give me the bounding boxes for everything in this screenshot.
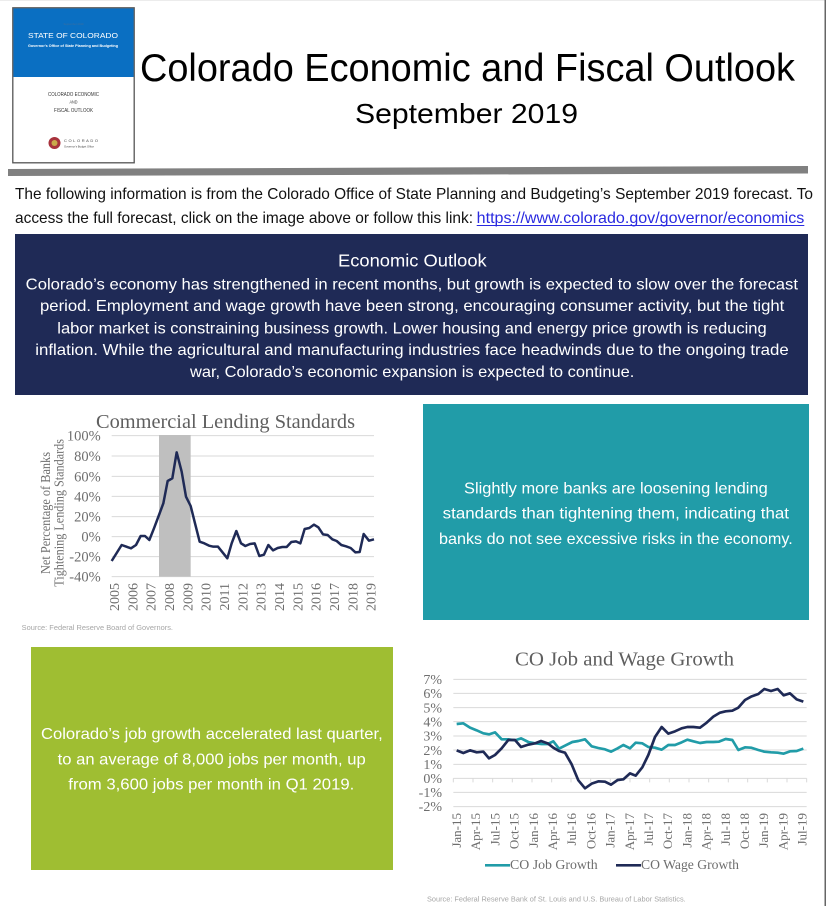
report cover thumbnail: Governor's Budget Office — [64, 144, 94, 148]
y axis labels: 0% — [81, 530, 101, 546]
y axis labels: 1% — [423, 758, 442, 773]
x axis labels: Jan-15 — [449, 813, 464, 848]
y axis labels: 80% — [74, 449, 101, 465]
intro text with link: access the full forecast, click on the image above or follow this link: — [15, 210, 473, 227]
panel body text — [26, 276, 799, 381]
report cover thumbnail: COLORADO ECONOMIC — [48, 92, 99, 98]
x axis labels: 2012 — [236, 583, 251, 611]
x axis labels: 2015 — [291, 583, 306, 611]
x axis labels: Apr-16 — [545, 813, 560, 850]
recession shading and line — [112, 435, 374, 577]
x axis labels: 2017 — [328, 583, 343, 611]
panel: job growth callout: Colorado’s job growth accelerated last quarter, — [41, 726, 383, 743]
report cover thumbnail: AND — [70, 100, 78, 105]
x axis labels: Jul-18 — [718, 813, 733, 846]
panel: economic outlook — [15, 234, 808, 395]
panel: lending callout: Slightly more banks are loosening lending — [464, 480, 768, 497]
x axis labels: Jan-17 — [603, 813, 618, 848]
y axis labels: 4% — [423, 716, 442, 730]
title: Colorado Economic and Fiscal Outlook — [140, 47, 795, 90]
intro text with link: https://www.colorado.gov/governor/economics — [477, 210, 804, 227]
y axis labels: 7% — [423, 673, 442, 688]
x axis labels: Jul-17 — [641, 812, 656, 846]
panel body text: war, Colorado’s economic expansion is expected to continue. — [189, 364, 634, 381]
legend: CO Wage Growth — [641, 858, 739, 873]
chart title: CO Job and Wage Growth — [515, 649, 734, 671]
x axis labels: Jan-16 — [526, 813, 541, 848]
panel body text: Colorado’s economy has strengthened in recent months, but growth is expected to slow over the forecast — [26, 276, 799, 293]
source note: Source: Federal Reserve Bank of St. Louis and U.S. Bureau of Labor Statistics. — [427, 897, 686, 904]
y axis title: Net Percentage of Banks — [38, 452, 53, 574]
y axis labels: -20% — [69, 550, 101, 566]
y axis labels: 6% — [423, 687, 442, 702]
y axis labels — [419, 673, 442, 815]
subtitle: September 2019 — [355, 98, 578, 129]
y axis labels: -40% — [69, 570, 101, 586]
x axis labels: 2005 — [108, 583, 123, 611]
x axis labels: 2018 — [346, 583, 361, 611]
panel: job growth callout: to an average of 8,000 jobs per month, up — [58, 751, 366, 768]
x axis labels: Oct-18 — [737, 813, 752, 849]
panel body text: period. Employment and wage growth have been strong, encouraging consumer activity, but the tight — [40, 298, 785, 315]
report cover thumbnail: FISCAL OUTLOOK — [54, 108, 94, 114]
legend: CO Job Growth — [510, 858, 598, 873]
y axis labels: 60% — [74, 469, 101, 485]
panel: lending callout: banks do not see excessive risks in the economy. — [439, 531, 793, 548]
y axis labels: 20% — [74, 510, 101, 526]
report cover thumbnail: September 2019 — [64, 22, 84, 26]
panel: job growth callout: from 3,600 jobs per month in Q1 2019. — [68, 777, 354, 794]
intro text with link: The following information is from the Colorado Office of State Planning and Budgeting’s September 2019 forecast. To — [15, 186, 813, 203]
report cover thumbnail — [13, 8, 134, 163]
chart title: Commercial Lending Standards — [96, 411, 355, 433]
x axis labels: Jul-16 — [564, 812, 579, 846]
x axis labels: 2010 — [200, 583, 215, 611]
y axis labels: 0% — [423, 772, 442, 787]
x axis labels: Apr-19 — [775, 813, 790, 850]
x axis labels — [449, 812, 810, 850]
panel body text: inflation. While the agricultural and manufacturing industries face headwinds due to the ongoing trade — [35, 342, 789, 359]
x axis labels: Apr-15 — [468, 813, 483, 850]
report cover thumbnail: STATE OF COLORADO — [28, 31, 118, 40]
x axis labels: Jul-19 — [795, 813, 810, 846]
x axis labels: Jul-15 — [487, 813, 502, 846]
y axis labels: -2% — [419, 800, 442, 815]
y axis labels: 3% — [423, 730, 442, 744]
x axis labels: 2011 — [218, 583, 233, 610]
x axis labels: 2006 — [126, 583, 141, 611]
x axis labels: 2007 — [145, 583, 160, 611]
legend — [485, 858, 739, 873]
panel: lending callout — [423, 404, 809, 620]
x axis labels: Oct-17 — [660, 813, 675, 849]
chart: commercial lending standards — [38, 411, 380, 611]
x axis labels: 2014 — [273, 583, 288, 611]
x axis labels: 2016 — [310, 583, 325, 611]
y axis labels: 100% — [67, 429, 101, 445]
y axis labels: 40% — [74, 489, 101, 505]
panel: lending callout: standards than tightening them, indicating that — [443, 506, 790, 523]
y axis title: Tightening Lending Standards — [52, 439, 66, 587]
panel body text: labor market is constraining business growth. Lower housing and energy price growth is reducing — [57, 320, 767, 337]
x axis labels: 2008 — [163, 583, 178, 611]
source note: Source: Federal Reserve Board of Governors. — [22, 625, 173, 632]
panel: job growth callout — [31, 647, 393, 870]
y axis labels: -1% — [419, 786, 442, 801]
report cover thumbnail: Governor's Office of State Planning and Budgeting — [28, 44, 118, 48]
x axis labels: Oct-16 — [583, 813, 598, 849]
x axis labels: 2013 — [255, 583, 270, 611]
x axis labels: Apr-18 — [699, 813, 714, 850]
x axis labels: Jan-19 — [756, 813, 771, 848]
y axis labels: 5% — [423, 702, 442, 716]
report cover thumbnail: COLORADO — [64, 138, 98, 143]
y axis labels — [67, 429, 101, 586]
y axis labels: 2% — [423, 744, 442, 759]
x axis labels: Apr-17 — [622, 813, 637, 850]
intro text with link — [15, 186, 813, 227]
chart: CO job and wage growth — [419, 649, 810, 873]
plotted lines — [453, 679, 807, 807]
panel heading: Economic Outlook — [338, 251, 487, 271]
x axis labels: Jan-18 — [679, 813, 694, 848]
x axis labels: Oct-15 — [507, 813, 522, 849]
x axis labels: 2009 — [181, 583, 196, 611]
y axis title — [38, 439, 66, 587]
x axis labels — [108, 583, 380, 611]
x axis labels: 2019 — [365, 583, 380, 611]
